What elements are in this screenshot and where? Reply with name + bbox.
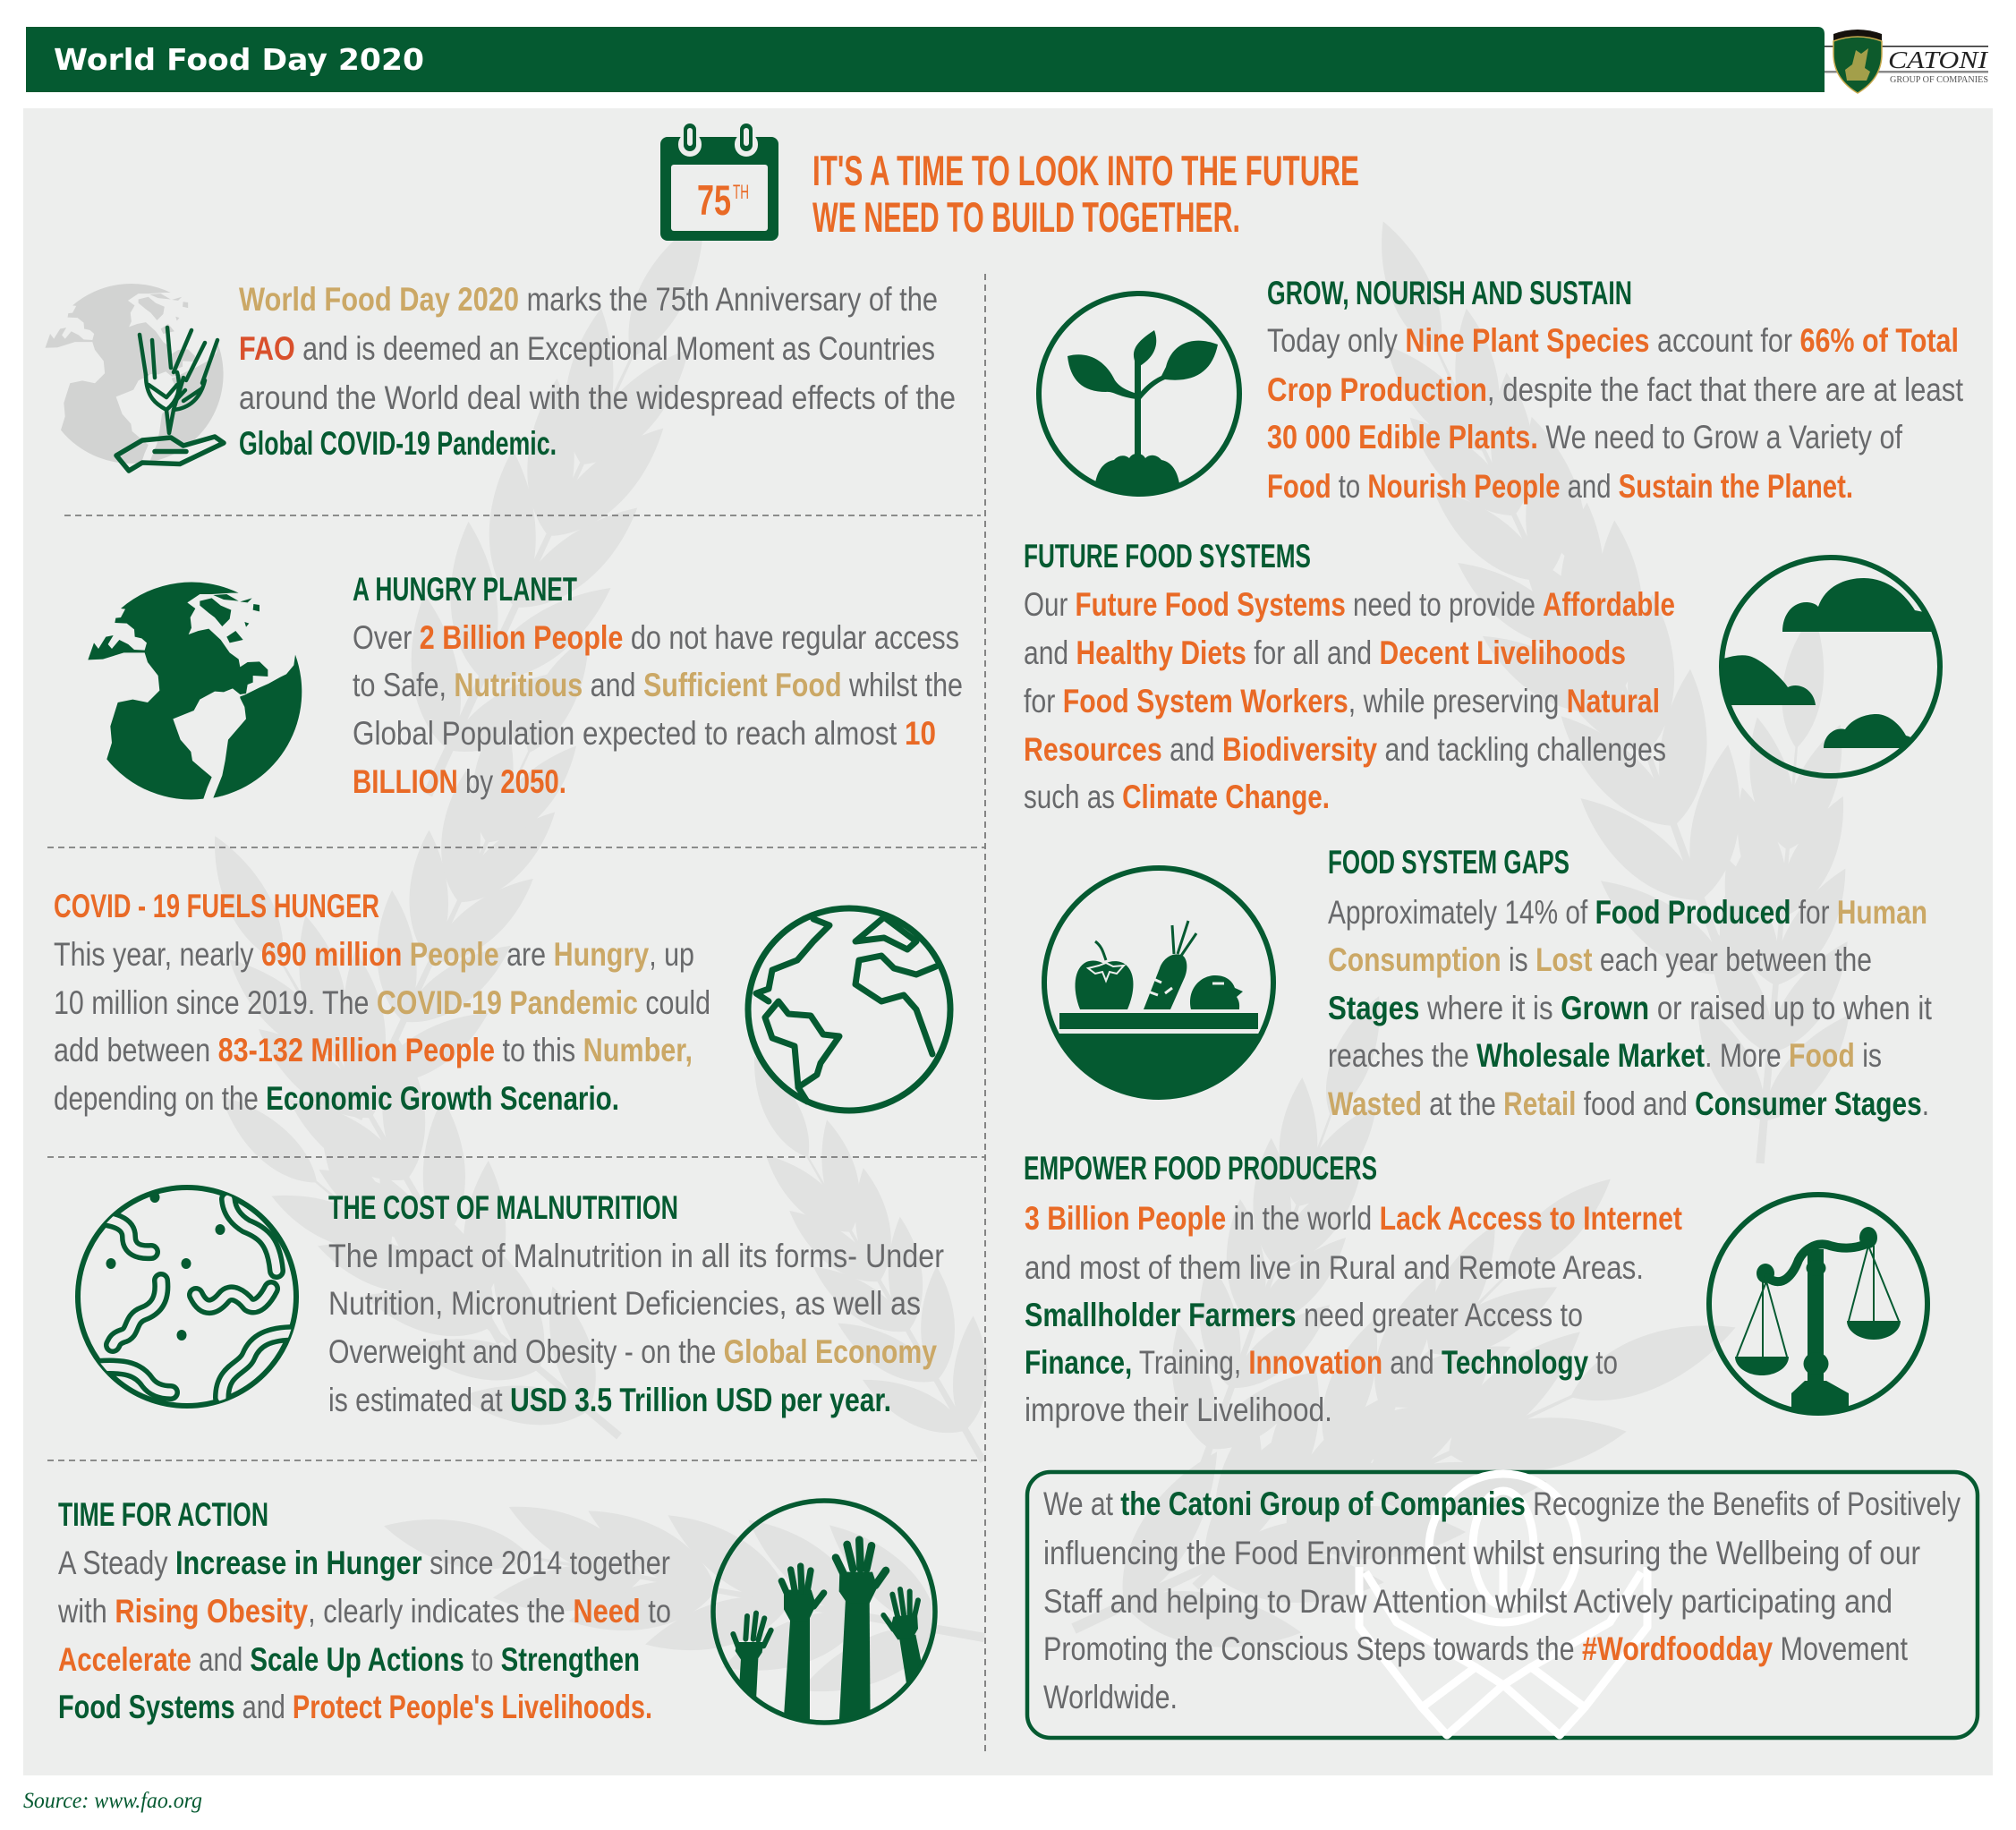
heading: a hungry planet: A HUNGRY PLANET <box>353 571 577 608</box>
intro text <box>239 281 956 462</box>
heading: covid-19 fuels hunger: COVID - 19 FUELS HUNGER <box>54 888 379 924</box>
text: future food systems: Our Future Food Systems need to provide Affordable <box>1024 586 1675 623</box>
logo: Catoni Group of Companies: GROUP OF COMPANIES <box>1890 74 1988 85</box>
text: grow, nourish and sustain: 30 000 Edible Plants. We need to Grow a Variety of <box>1267 419 1903 455</box>
text: empower food producers <box>1025 1200 1682 1428</box>
text: a hungry planet <box>353 619 963 800</box>
text: covid-19 fuels hunger: depending on the Economic Growth Scenario. <box>54 1080 619 1117</box>
text: grow, nourish and sustain: Today only Nine Plant Species account for 66% of Total <box>1267 322 1959 359</box>
text: food system gaps: reaches the Wholesale Market. More Food is <box>1328 1037 1882 1074</box>
logo: Catoni Group of Companies: CATONI <box>1888 47 1989 73</box>
text: empower food producers: 3 Billion People in the world Lack Access to Internet <box>1025 1200 1682 1237</box>
icon: sprout <box>1039 294 1239 501</box>
main headline: WE NEED TO BUILD TOGETHER. <box>812 193 1240 241</box>
heading: empower food producers: EMPOWER FOOD PRODUCERS <box>1024 1150 1377 1187</box>
intro text: FAO and is deemed an Exceptional Moment as Countries <box>239 330 935 367</box>
text: future food systems: such as Climate Change. <box>1024 779 1330 815</box>
intro text: Global COVID-19 Pandemic. <box>239 425 557 462</box>
text: covid-19 fuels hunger: 10 million since 2019. The COVID-19 Pandemic could <box>54 984 710 1021</box>
heading: the cost of malnutrition: THE COST OF MALNUTRITION <box>328 1189 678 1226</box>
text: empower food producers: and most of them live in Rural and Remote Areas. <box>1025 1249 1644 1286</box>
text: covid-19 fuels hunger: add between 83-132 Million People to this Number, <box>54 1032 693 1068</box>
text: Catoni statement: Staff and helping to Draw Attention whilst Actively participating and <box>1043 1583 1893 1620</box>
section: intro <box>46 281 956 471</box>
logo: Catoni Group of Companies <box>1825 30 1989 93</box>
heading: food system gaps: FOOD SYSTEM GAPS <box>1328 844 1569 881</box>
header title: World Food Day 2020 <box>54 42 424 77</box>
text: food system gaps: Consumption is Lost each year between the <box>1328 941 1872 978</box>
heading: time for action: TIME FOR ACTION <box>58 1496 268 1533</box>
text: Catoni statement <box>1043 1485 1961 1715</box>
section: empower food producers <box>1024 1150 1927 1428</box>
section: the cost of malnutrition <box>78 1187 944 1418</box>
text: the cost of malnutrition: is estimated at USD 3.5 Trillion USD per year. <box>328 1382 891 1418</box>
text: empower food producers: Smallholder Farmers need greater Access to <box>1025 1297 1583 1333</box>
text: Catoni statement: Promoting the Conscious Steps towards the #Wordfoodday Movement <box>1043 1630 1909 1667</box>
icon: white hands holding globe watermark <box>1359 1474 1647 1735</box>
icon: vegetables in bowl <box>1042 865 1276 1100</box>
heading: future food systems: FUTURE FOOD SYSTEMS <box>1024 538 1311 575</box>
main headline: IT'S A TIME TO LOOK INTO THE FUTURE <box>812 147 1359 194</box>
text: a hungry planet: Global Population expected to reach almost 10 <box>353 715 936 752</box>
section: future food systems <box>1024 538 1942 815</box>
icon: solid globe <box>88 583 302 799</box>
section: time for action <box>57 1496 935 1730</box>
text: the cost of malnutrition: Overweight and Obesity - on the Global Economy <box>328 1333 937 1370</box>
icon: wheat in hand over globe <box>46 284 224 471</box>
text: grow, nourish and sustain: Food to Nourish People and Sustain the Planet. <box>1267 468 1853 505</box>
icon: microbes circle <box>78 1187 296 1406</box>
section: grow, nourish and sustain <box>1039 275 1964 505</box>
icon: raised hands <box>713 1501 935 1730</box>
text: the cost of malnutrition: Nutrition, Micronutrient Deficiencies, as well as <box>328 1285 921 1322</box>
section: a hungry planet <box>88 571 963 800</box>
header bar <box>26 27 1825 92</box>
text: time for action: with Rising Obesity, clearly indicates the Need to <box>57 1593 671 1630</box>
heading: grow, nourish and sustain: GROW, NOURISH AND SUSTAIN <box>1267 275 1632 311</box>
icon: outline globe <box>748 908 950 1111</box>
text: time for action: A Steady Increase in Hunger since 2014 together <box>58 1545 670 1581</box>
text: time for action <box>57 1545 671 1725</box>
source line: Source: www.fao.org <box>23 1789 202 1813</box>
text: grow, nourish and sustain <box>1267 322 1964 505</box>
text: time for action: Accelerate and Scale Up Actions to Strengthen <box>58 1641 640 1678</box>
text: a hungry planet: to Safe, Nutritious and Sufficient Food whilst the <box>353 667 963 703</box>
callout: Catoni statement box <box>1027 1472 1978 1738</box>
icon: calendar 75th: 75 <box>697 176 731 224</box>
text: the cost of malnutrition: The Impact of Malnutrition in all its forms- Under <box>328 1238 944 1274</box>
section: covid-19 fuels hunger <box>54 888 950 1117</box>
main headline <box>812 147 1359 241</box>
text: future food systems: Resources and Biodiversity and tackling challenges <box>1024 731 1666 768</box>
text: future food systems: for Food System Workers, while preserving Natural <box>1024 683 1660 719</box>
text: future food systems <box>1024 586 1675 815</box>
text: a hungry planet: Over 2 Billion People do not have regular access <box>353 619 959 656</box>
text: Catoni statement: Worldwide. <box>1043 1679 1178 1715</box>
intro text: around the World deal with the widespread effects of the <box>239 379 956 416</box>
text: empower food producers: improve their Livelihood. <box>1025 1392 1332 1428</box>
text: empower food producers: Finance, Training, Innovation and Technology to <box>1025 1344 1618 1381</box>
text: a hungry planet: BILLION by 2050. <box>353 763 566 800</box>
section: food system gaps <box>1029 844 1933 1122</box>
text: future food systems: and Healthy Diets for all and Decent Livelihoods <box>1024 634 1626 671</box>
text: food system gaps <box>1328 894 1933 1122</box>
text: covid-19 fuels hunger: This year, nearly 690 million People are Hungry, up <box>54 936 694 973</box>
icon: calendar 75th: TH <box>733 181 749 203</box>
text: food system gaps: Approximately 14% of Food Produced for Human <box>1328 894 1927 931</box>
text: time for action: Food Systems and Protect People's Livelihoods. <box>58 1689 652 1725</box>
text: food system gaps: Stages where it is Grown or raised up to when it <box>1328 990 1933 1026</box>
icon: calendar 75th <box>660 123 778 241</box>
text: food system gaps: Wasted at the Retail food and Consumer Stages. <box>1328 1085 1929 1122</box>
icon: balance scales <box>1709 1195 1927 1423</box>
icon: clouds <box>1714 558 1942 776</box>
text: the cost of malnutrition <box>328 1238 944 1418</box>
text: covid-19 fuels hunger <box>54 936 710 1117</box>
intro text: World Food Day 2020 marks the 75th Anniversary of the <box>239 281 938 318</box>
